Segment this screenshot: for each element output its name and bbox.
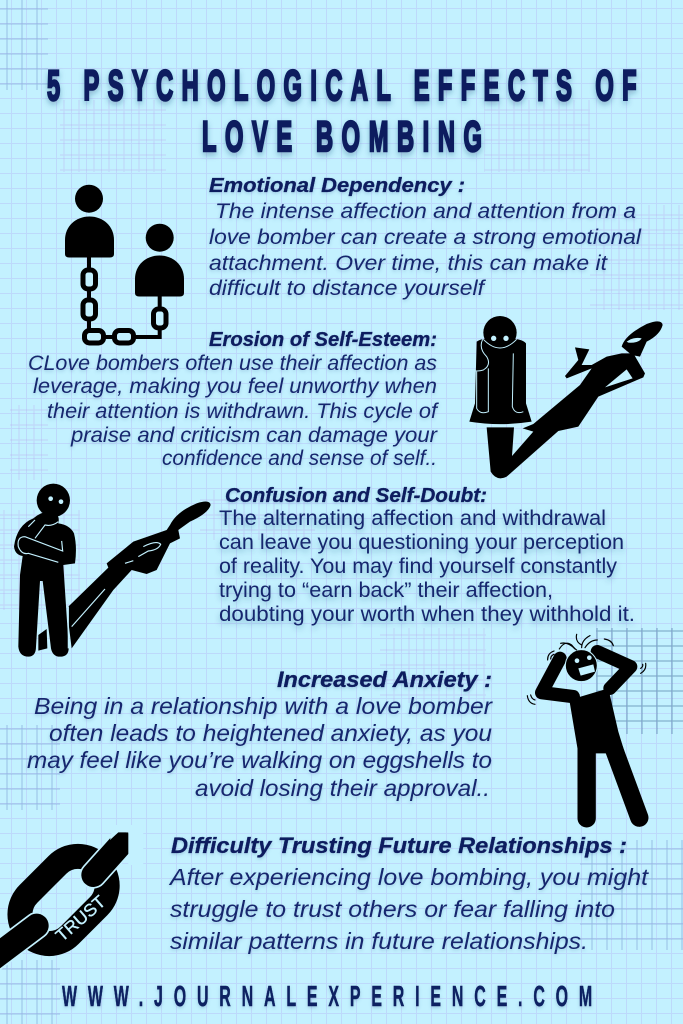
text: erosion of self-esteem: praise and criticism can damage your — [70, 424, 438, 447]
panel: erosion of self-esteem — [28, 316, 663, 478]
icon: thinking figure with question-mark shadow — [14, 484, 211, 657]
text: increased anxiety: Being in a relationship with a love bomber — [34, 693, 493, 719]
text: erosion of self-esteem: leverage, making you feel unworthy when — [33, 375, 437, 398]
title: LOVE BOMBING — [202, 114, 482, 161]
panel: difficulty trusting future relationships — [0, 825, 650, 958]
icon: broken trust chain link: TRUST — [51, 891, 110, 945]
text: increased anxiety: often leads to heightened anxiety, as you — [49, 720, 492, 746]
text: confusion and self-doubt: doubting your worth when they withhold it. — [219, 603, 635, 626]
panel: emotional dependency — [65, 175, 642, 343]
footer website: WWW.JOURNALEXPERIENCE.COM — [62, 980, 592, 1012]
text: increased anxiety: may feel like you’re walking on eggshells to — [27, 747, 492, 773]
text: confusion and self-doubt: trying to “earn back” their affection, — [219, 579, 553, 602]
text: difficulty trusting: similar patterns in future relationships. — [170, 928, 588, 954]
text: increased anxiety — [27, 693, 493, 801]
text: erosion of self-esteem: confidence and sense of self.. — [162, 447, 437, 470]
panel: increased anxiety — [27, 634, 646, 818]
panel: confusion and self-doubt — [14, 484, 635, 657]
icon: broken trust chain link — [0, 825, 143, 958]
text: difficulty trusting — [168, 864, 650, 954]
text: difficulty trusting: struggle to trust others or fear falling into — [170, 896, 615, 922]
icon: anxious figure holding head — [527, 634, 646, 818]
text: erosion of self-esteem — [28, 352, 439, 470]
heading: confusion and self-doubt: Confusion and Self-Doubt: — [225, 485, 487, 507]
title: 5 PSYCHOLOGICAL EFFECTS OF — [47, 63, 637, 110]
heading: difficulty trusting: Difficulty Trusting Future Relationships : — [171, 833, 627, 858]
title — [47, 63, 637, 161]
text: emotional dependency: love bomber can create a strong emotional — [209, 226, 642, 249]
text: confusion and self-doubt — [219, 507, 635, 626]
text: difficulty trusting: After experiencing love bombing, you might — [168, 864, 650, 890]
heading: increased anxiety: Increased Anxiety : — [277, 667, 492, 692]
text: erosion of self-esteem: their attention is withdrawn. This cycle of — [47, 400, 439, 423]
text: confusion and self-doubt: can leave you questioning your perception — [219, 531, 624, 554]
text: emotional dependency: The intense affection and attention from a — [215, 200, 636, 223]
icon: figure with distorted shadow — [469, 316, 663, 478]
text: confusion and self-doubt: The alternating affection and withdrawal — [219, 507, 606, 530]
text: emotional dependency — [209, 200, 642, 300]
heading: erosion of self-esteem: Erosion of Self-Esteem: — [209, 329, 437, 351]
text: erosion of self-esteem: CLove bombers often use their affection as — [28, 352, 437, 375]
icon: two chained people — [65, 185, 184, 343]
text: increased anxiety: avoid losing their approval.. — [195, 775, 490, 801]
text: confusion and self-doubt: of reality. You may find yourself constantly — [219, 555, 618, 578]
heading: emotional dependency: Emotional Dependency : — [209, 175, 465, 197]
text: emotional dependency: difficult to distance yourself — [209, 277, 486, 300]
text: emotional dependency: attachment. Over time, this can make it — [209, 252, 608, 275]
